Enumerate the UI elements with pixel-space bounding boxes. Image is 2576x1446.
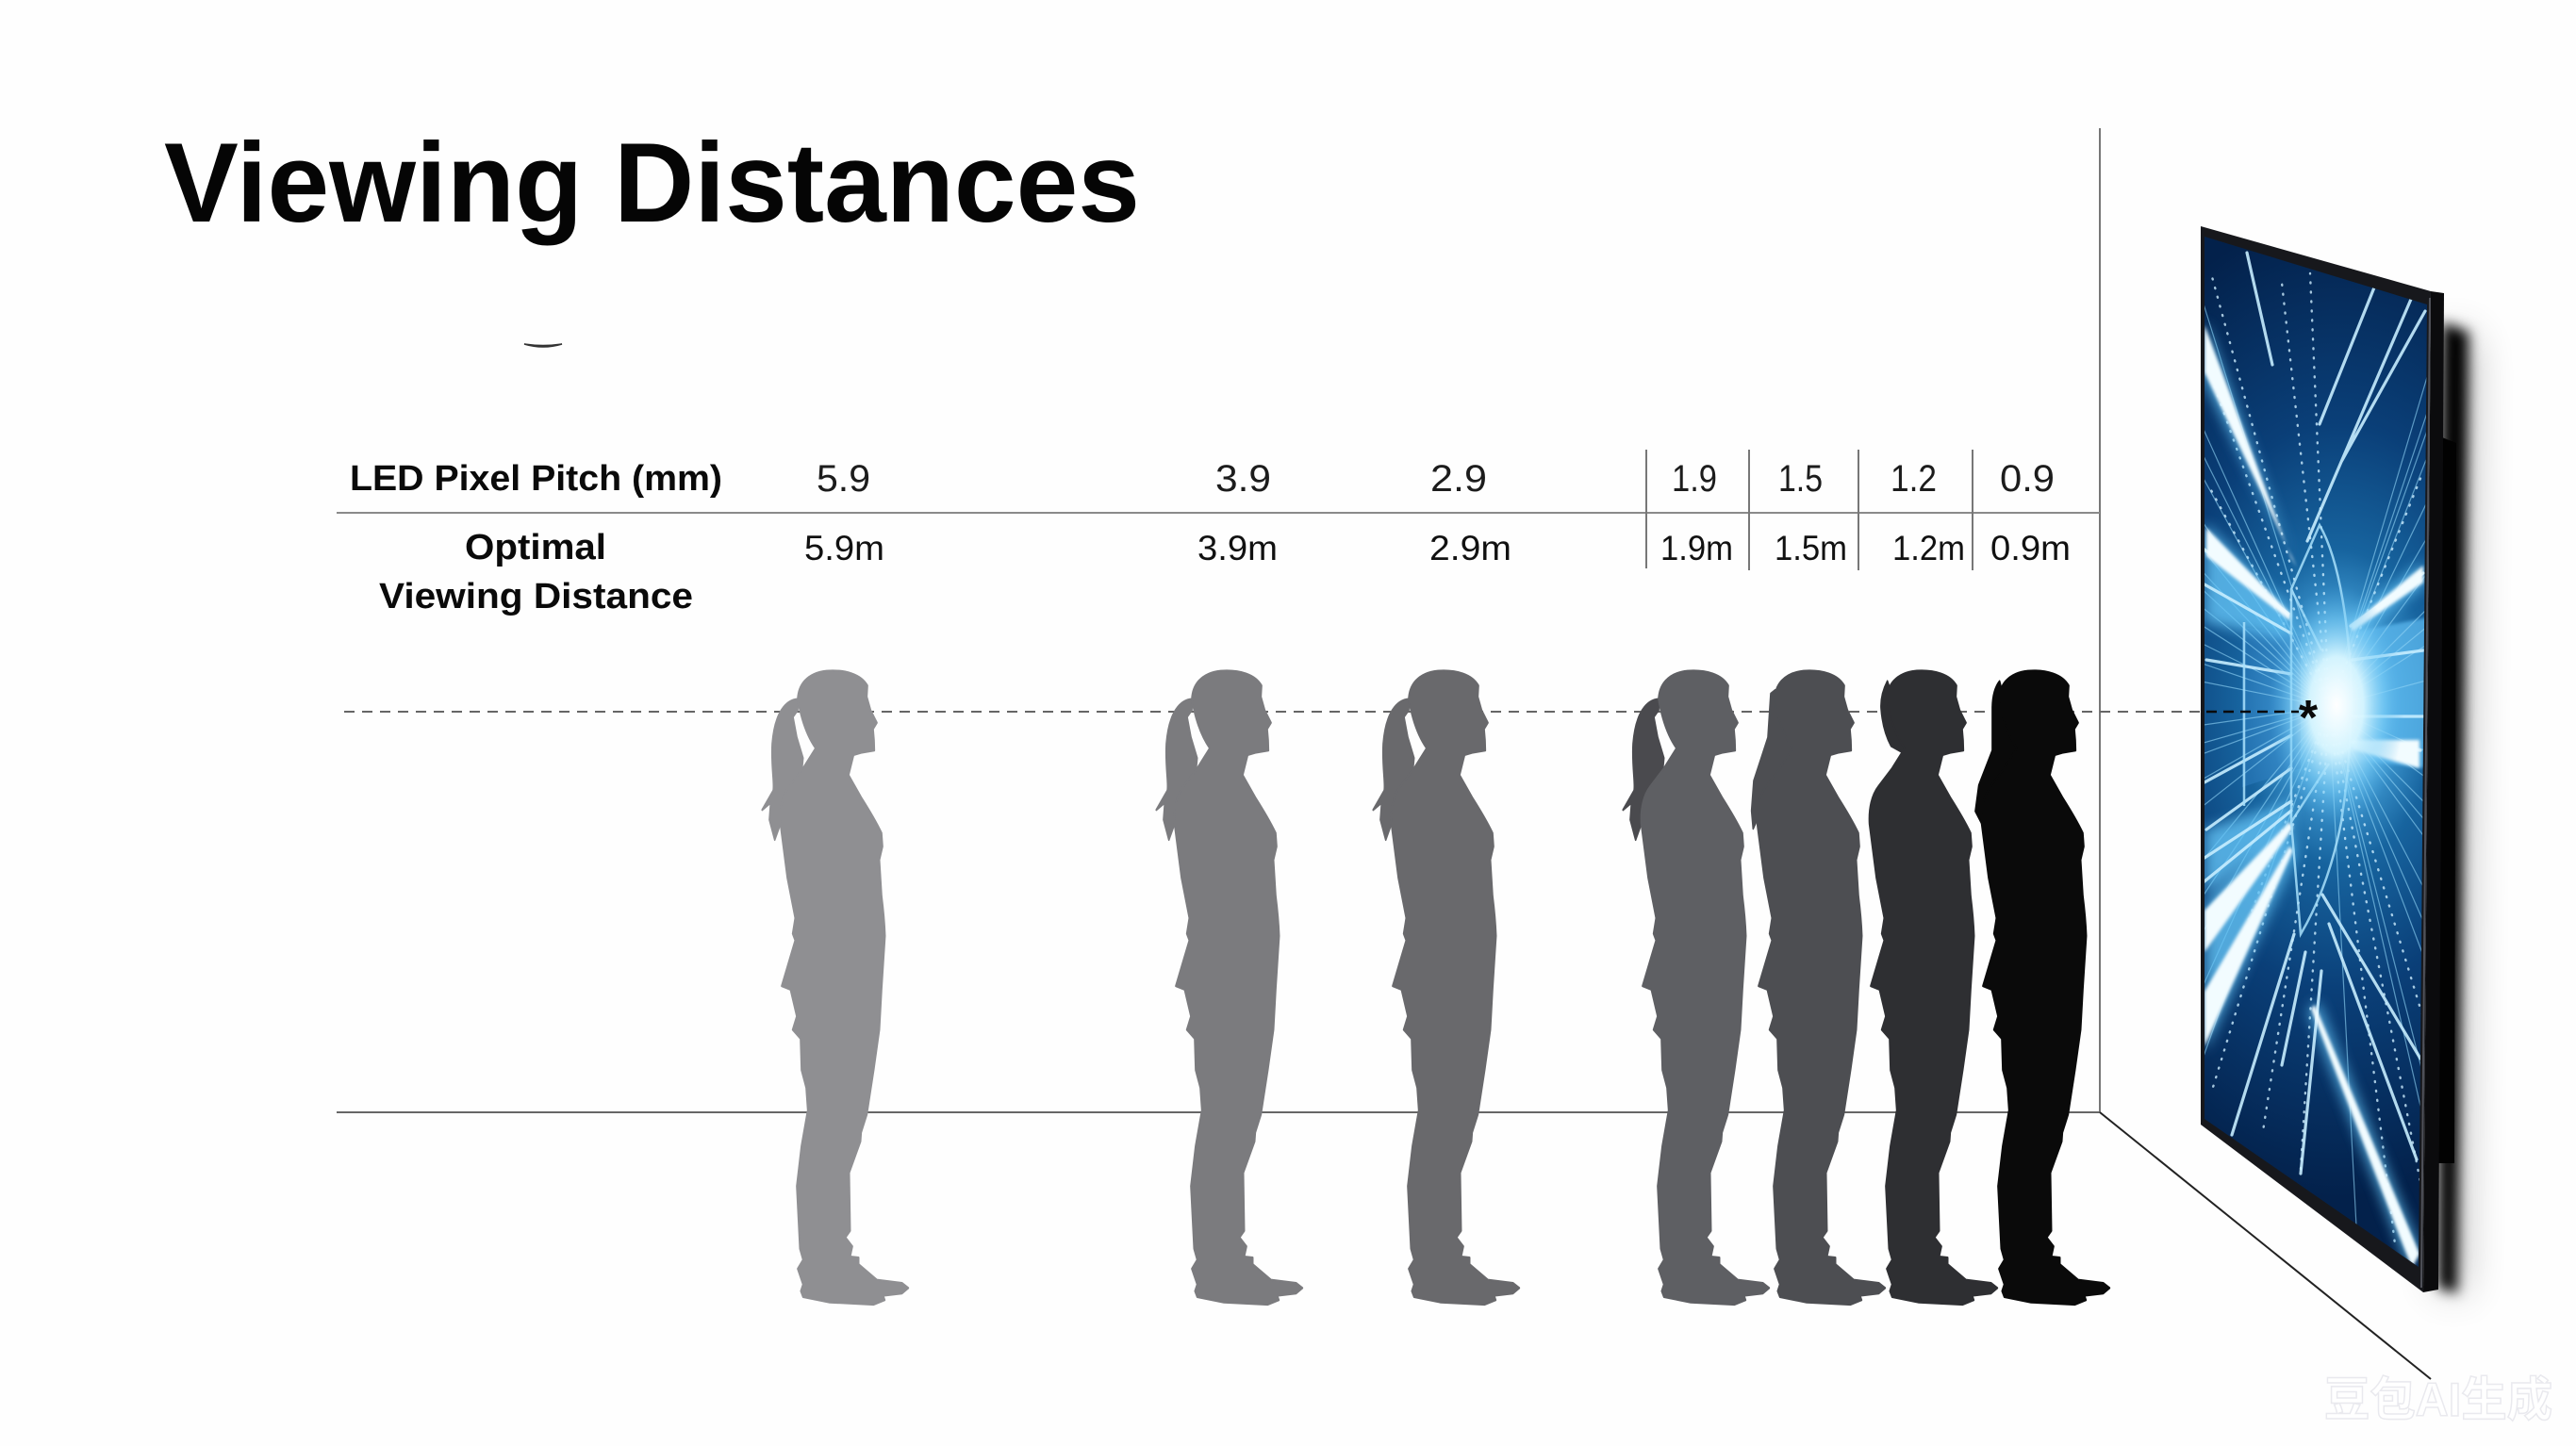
central glow [2274, 593, 2401, 818]
stray mark [524, 344, 562, 347]
wall mount bracket [2438, 437, 2456, 1163]
distance values: 2.9m [1429, 529, 1511, 567]
distance values: 1.5m [1775, 529, 1847, 567]
row label: viewing distance: Optimal [465, 528, 606, 567]
wall shadow behind display [2438, 322, 2472, 1296]
pitch values [817, 458, 2055, 500]
distance values: 5.9m [804, 529, 884, 567]
pitch values: 2.9 [1430, 458, 1487, 500]
blue halo under bright rays [2204, 320, 2423, 1268]
silhouette: 5.9m viewer [762, 671, 908, 1305]
light bands [2365, 616, 2425, 769]
dashed line over display [2206, 711, 2299, 713]
pitch values: 1.2 [1891, 458, 1937, 500]
display side edge [2423, 291, 2444, 1292]
silhouette: 1.5m viewer [1752, 671, 1885, 1305]
silhouette: 1.9m viewer [1623, 671, 1769, 1305]
row label: pixel pitch: LED Pixel Pitch (mm) [350, 459, 722, 499]
silhouette: 1.2m viewer [1869, 671, 1997, 1305]
dotted rays [2211, 273, 2423, 1244]
distance values: 1.9m [1660, 529, 1733, 567]
pitch values: 1.9 [1672, 458, 1717, 500]
bright rays [2204, 325, 2423, 1268]
eye level dashed line [344, 711, 2201, 713]
watermark: 豆包AI生成 [2324, 1373, 2552, 1426]
display frame [2201, 226, 2431, 1292]
display screen with light rays [2204, 237, 2427, 1267]
row label: viewing distance [379, 528, 693, 616]
distance values: 3.9m [1197, 529, 1278, 567]
table: pitch and distance [337, 450, 2100, 616]
pitch values: 1.5 [1778, 458, 1823, 500]
silhouette: 2.9m viewer [1373, 671, 1519, 1305]
medium rays [2204, 253, 2425, 1174]
pitch values: 0.9 [2000, 458, 2055, 500]
LED display [2197, 226, 2444, 1301]
pitch values: 3.9 [1215, 458, 1271, 500]
distance values: 0.9m [1990, 529, 2071, 567]
pitch values: 5.9 [817, 458, 870, 500]
silhouette: 0.9m viewer [1975, 671, 2109, 1305]
room lines [337, 128, 2431, 1379]
row label: viewing distance: Viewing Distance [379, 577, 693, 616]
thin rays [2197, 283, 2433, 1244]
distance values [804, 529, 2071, 567]
distance values: 1.2m [1892, 529, 1965, 567]
silhouette: 3.9m viewer [1156, 671, 1302, 1305]
asterisk focal point: * [2299, 691, 2319, 746]
hexagonal wireframe [2244, 525, 2352, 934]
title: Viewing Distances [164, 120, 1140, 246]
